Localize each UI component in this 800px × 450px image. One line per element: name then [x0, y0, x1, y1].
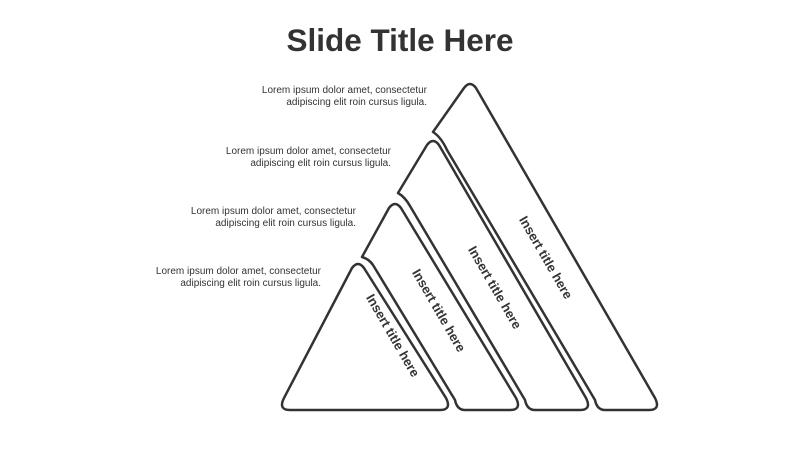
text block 1 [156, 266, 321, 289]
title: Slide Title Here [286, 22, 514, 58]
layer 2: Insert title here [409, 266, 469, 355]
layer 3 [398, 141, 588, 410]
layer 4 [433, 84, 657, 410]
text block 4: Lorem ipsum dolor amet, consectetur [262, 85, 427, 96]
layer 4: Insert title here [516, 213, 576, 302]
layer 3: Insert title here [465, 243, 525, 332]
text block 3: Lorem ipsum dolor amet, consectetur [226, 146, 391, 157]
text block 1: adipiscing elit roin cursus ligula. [180, 278, 321, 289]
text block 2: adipiscing elit roin cursus ligula. [215, 218, 356, 229]
layer 1 [282, 264, 448, 410]
text block 3: adipiscing elit roin cursus ligula. [250, 158, 391, 169]
text block 1: Lorem ipsum dolor amet, consectetur [156, 266, 321, 277]
text block 4: adipiscing elit roin cursus ligula. [286, 97, 427, 108]
text block 4 [262, 85, 427, 108]
layer 1: Insert title here [363, 291, 423, 380]
text block 3 [226, 146, 391, 169]
layer 2 [362, 204, 518, 410]
text block 2 [191, 206, 356, 229]
text block 2: Lorem ipsum dolor amet, consectetur [191, 206, 356, 217]
